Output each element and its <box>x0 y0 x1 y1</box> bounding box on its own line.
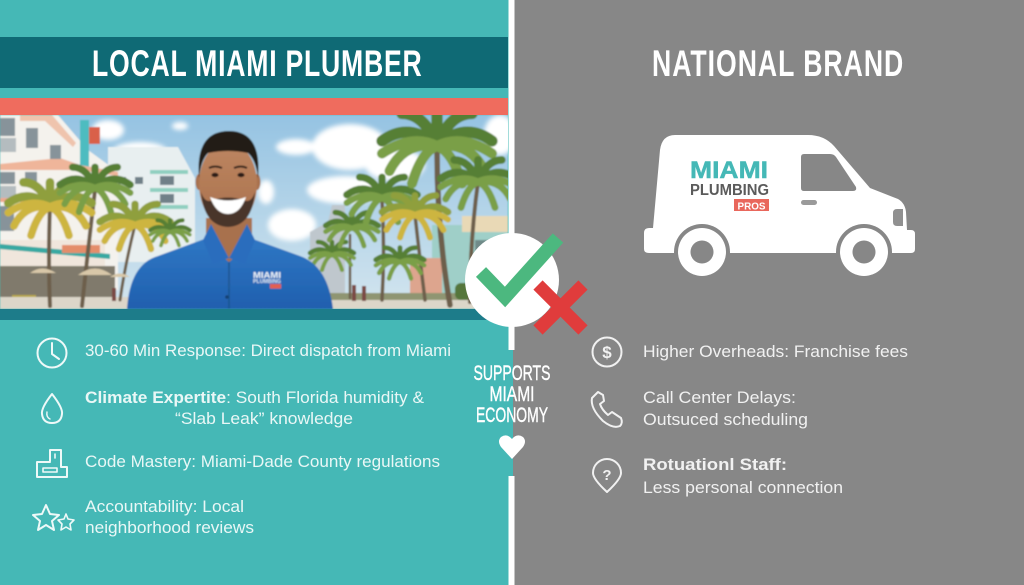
badge: check and cross <box>465 233 583 330</box>
text: call center <box>643 388 808 429</box>
centre divider <box>508 0 514 585</box>
text: higher overheads: Higher Overheads: Franchise fees <box>643 342 908 361</box>
dark band under photo <box>0 309 508 320</box>
callout: supports Miami economy: ECONOMY <box>476 404 548 427</box>
heading: national brand: NATIONAL BRAND <box>652 43 903 84</box>
icon: code document <box>37 450 67 477</box>
icon: dollar: $ <box>602 343 612 362</box>
heading band: local Miami plumber <box>0 37 508 88</box>
text: climate expertise: “Slab Leak” knowledge <box>175 409 353 428</box>
text: accountability: neighborhood reviews <box>85 518 254 537</box>
icon: water drop <box>42 394 62 423</box>
callout: supports Miami economy: MIAMI <box>490 383 534 406</box>
far towers <box>310 205 345 300</box>
coral accent stripe <box>0 98 508 115</box>
icon: white van with logo: PLUMBING <box>690 182 769 199</box>
icon: dollar <box>592 338 622 366</box>
icon: heart <box>499 435 525 459</box>
right low buildings <box>432 225 508 298</box>
text: accountability <box>85 497 254 537</box>
text: response time: 30-60 Min Response: Direct dispatch from Miami <box>85 341 451 360</box>
panel: local plumber background <box>0 0 513 585</box>
icon: white van with logo <box>640 135 920 284</box>
callout: supports Miami economy: SUPPORTS <box>474 362 550 385</box>
palm crowns <box>310 242 354 270</box>
icon: clock <box>38 338 66 368</box>
photo: plumber on a Miami street: PLUMBING <box>253 279 281 285</box>
white deco building centre <box>108 147 195 262</box>
white deco building left <box>0 115 118 290</box>
text: accountability: Accountability: Local <box>85 497 244 516</box>
plumber <box>127 238 333 309</box>
list: national brand drawbacks <box>592 338 908 497</box>
icon: question pin: ? <box>602 467 612 484</box>
van logo: MIAMI <box>690 157 768 184</box>
heading band: local Miami plumber: LOCAL MIAMI PLUMBER <box>92 43 422 84</box>
text: climate expertise <box>85 388 425 428</box>
text: call center: Call Center Delays: <box>643 388 796 407</box>
icon: review stars <box>33 505 74 530</box>
ground <box>0 297 508 309</box>
text: rotational staff: Less personal connection <box>643 478 843 497</box>
icon: question pin <box>593 459 621 492</box>
text: climate expertise: Climate Expertite: South Florida humidity & <box>85 388 425 407</box>
icon: white van with logo: PROS <box>738 200 766 212</box>
shirt logo: MIAMI <box>253 270 281 280</box>
umbrellas and people <box>30 268 130 277</box>
text: rotational staff: Rotuationl Staff: <box>643 455 787 474</box>
callout: supports Miami economy <box>474 362 550 459</box>
list: local plumber benefits <box>33 338 451 537</box>
trunks <box>49 150 478 306</box>
panel: national brand background <box>513 0 1024 585</box>
text: code mastery: Code Mastery: Miami-Dade County regulations <box>85 452 440 471</box>
icon: phone <box>592 392 622 427</box>
text: rotational staff <box>643 455 843 497</box>
text: call center: Outsuced scheduling <box>643 410 808 429</box>
photo: plumber on a Miami street <box>0 114 516 309</box>
